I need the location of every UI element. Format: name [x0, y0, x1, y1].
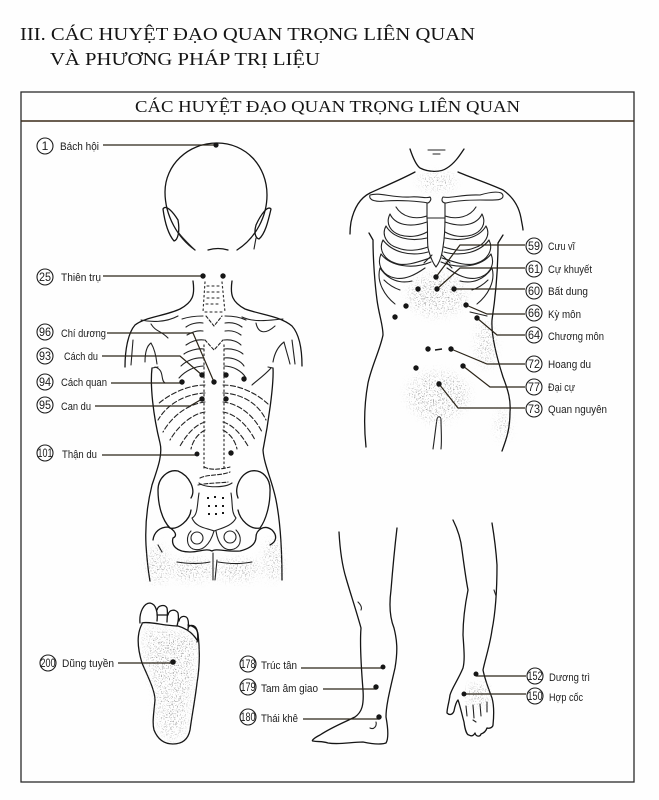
torso outline [350, 149, 523, 234]
figure: back of head [163, 143, 271, 250]
upper ribs right [224, 316, 246, 378]
label: Cưu vĩ: Cưu vĩ [548, 241, 576, 253]
label: Cách du [37, 348, 229, 378]
label: Cự khuyết: Cự khuyết [548, 264, 592, 276]
label: Chí dương [37, 324, 217, 385]
figure: front torso with ribcage [350, 149, 523, 451]
label: Đại cự: 77 [528, 380, 540, 394]
page title: III. CÁC HUYỆT ĐẠO QUAN TRỌNG LIÊN QUAN [20, 23, 475, 44]
label: Can du: Can du [61, 401, 91, 413]
page title [20, 23, 475, 69]
label: Cách quan [37, 374, 247, 390]
label: Chương môn [392, 314, 604, 343]
label: Cách du: 93 [39, 349, 51, 363]
pelvis [158, 471, 193, 528]
spine [204, 345, 224, 470]
label: Thận du: Thận du [62, 449, 97, 461]
label: Quan nguyên: 73 [528, 402, 540, 416]
label: Dũng tuyền [40, 655, 176, 671]
label: Chương môn: Chương môn [548, 331, 604, 343]
label: Cách quan: 94 [39, 375, 51, 389]
label: Hoang du [425, 346, 591, 372]
label: Bách hội [37, 138, 219, 154]
foot outline [138, 624, 199, 744]
label: Cách quan: Cách quan [61, 377, 107, 389]
figure: sole of foot [138, 603, 199, 744]
panel heading: CÁC HUYỆT ĐẠO QUAN TRỌNG LIÊN QUAN [135, 97, 520, 116]
label: Bách hội: 1 [42, 139, 49, 153]
label: Hợp cốc: 150 [528, 689, 543, 703]
label: Tam âm giao: Tam âm giao [261, 683, 318, 695]
label: Tam âm giao: 179 [240, 680, 256, 694]
label: Thiên trụ: Thiên trụ [61, 272, 101, 284]
figure: back torso with spine, ribs and pelvis [125, 281, 302, 583]
sternum [427, 203, 445, 267]
ribs right [441, 207, 493, 304]
label: Trúc tân: Trúc tân [261, 660, 297, 672]
label: Đại cự [413, 363, 576, 395]
label: Bất dung: Bất dung [548, 286, 588, 298]
label: Quan nguyên [436, 381, 607, 417]
label: Dũng tuyền: 200 [40, 656, 56, 670]
label: Thái khê: Thái khê [261, 713, 298, 725]
label: Bất dung: 60 [528, 284, 540, 298]
label: Trúc tân: 178 [240, 657, 256, 671]
label: Tam âm giao [240, 679, 379, 695]
ribs left [379, 207, 431, 304]
shading [148, 540, 281, 583]
label: Cưu vĩ [433, 238, 576, 280]
label: Hợp cốc: Hợp cốc [549, 692, 583, 704]
label: Chí dương: 96 [39, 325, 51, 339]
figure: lower leg and foot [312, 528, 397, 744]
label: Đại cự: Đại cự [548, 382, 576, 394]
label: Dương trì: Dương trì [549, 672, 590, 684]
label: Can du [37, 396, 229, 413]
label: Chương môn: 64 [528, 328, 540, 342]
label: Thận du [37, 445, 234, 461]
label: Dương trì [474, 668, 590, 684]
figure: forearm and hand [447, 520, 497, 736]
label: Quan nguyên: Quan nguyên [548, 404, 607, 416]
label: Dũng tuyền: Dũng tuyền [62, 658, 114, 670]
label: Kỳ môn: Kỳ môn [548, 309, 581, 321]
stippled sole [145, 628, 195, 740]
label: Thận du: 101 [38, 446, 53, 460]
label: Cưu vĩ: 59 [528, 239, 540, 253]
upper ribs left [179, 316, 204, 378]
label: Bách hội: Bách hội [60, 141, 99, 153]
torso outline [125, 281, 302, 367]
label: Kỳ môn [403, 302, 581, 321]
clavicles [370, 194, 431, 203]
label: Thái khê [240, 709, 382, 725]
label: Chí dương: Chí dương [61, 328, 106, 340]
shading [408, 175, 508, 439]
label: Hoang du: 72 [528, 357, 540, 371]
label: Hợp cốc [462, 688, 583, 704]
toes [140, 603, 197, 640]
label: Bất dung [415, 283, 588, 299]
lower ribs left [158, 385, 205, 449]
label: Trúc tân [240, 656, 386, 672]
neck vertebrae [203, 282, 225, 312]
scapulae and arm marks [131, 316, 178, 365]
label: Thiên trụ: 25 [39, 270, 51, 284]
lower ribs right [223, 385, 268, 449]
label: Kỳ môn: 66 [528, 306, 540, 320]
label: Thiên trụ [37, 269, 226, 285]
page title: VÀ PHƯƠNG PHÁP TRỊ LIỆU [50, 48, 320, 69]
label: Dương trì: 152 [528, 669, 543, 683]
label: Hoang du: Hoang du [548, 359, 591, 371]
label: Thái khê: 180 [240, 710, 256, 724]
label: Cự khuyết: 61 [528, 262, 540, 276]
label: Can du: 95 [39, 398, 51, 412]
label: Cách du: Cách du [64, 351, 98, 363]
label: Cự khuyết [434, 261, 592, 292]
